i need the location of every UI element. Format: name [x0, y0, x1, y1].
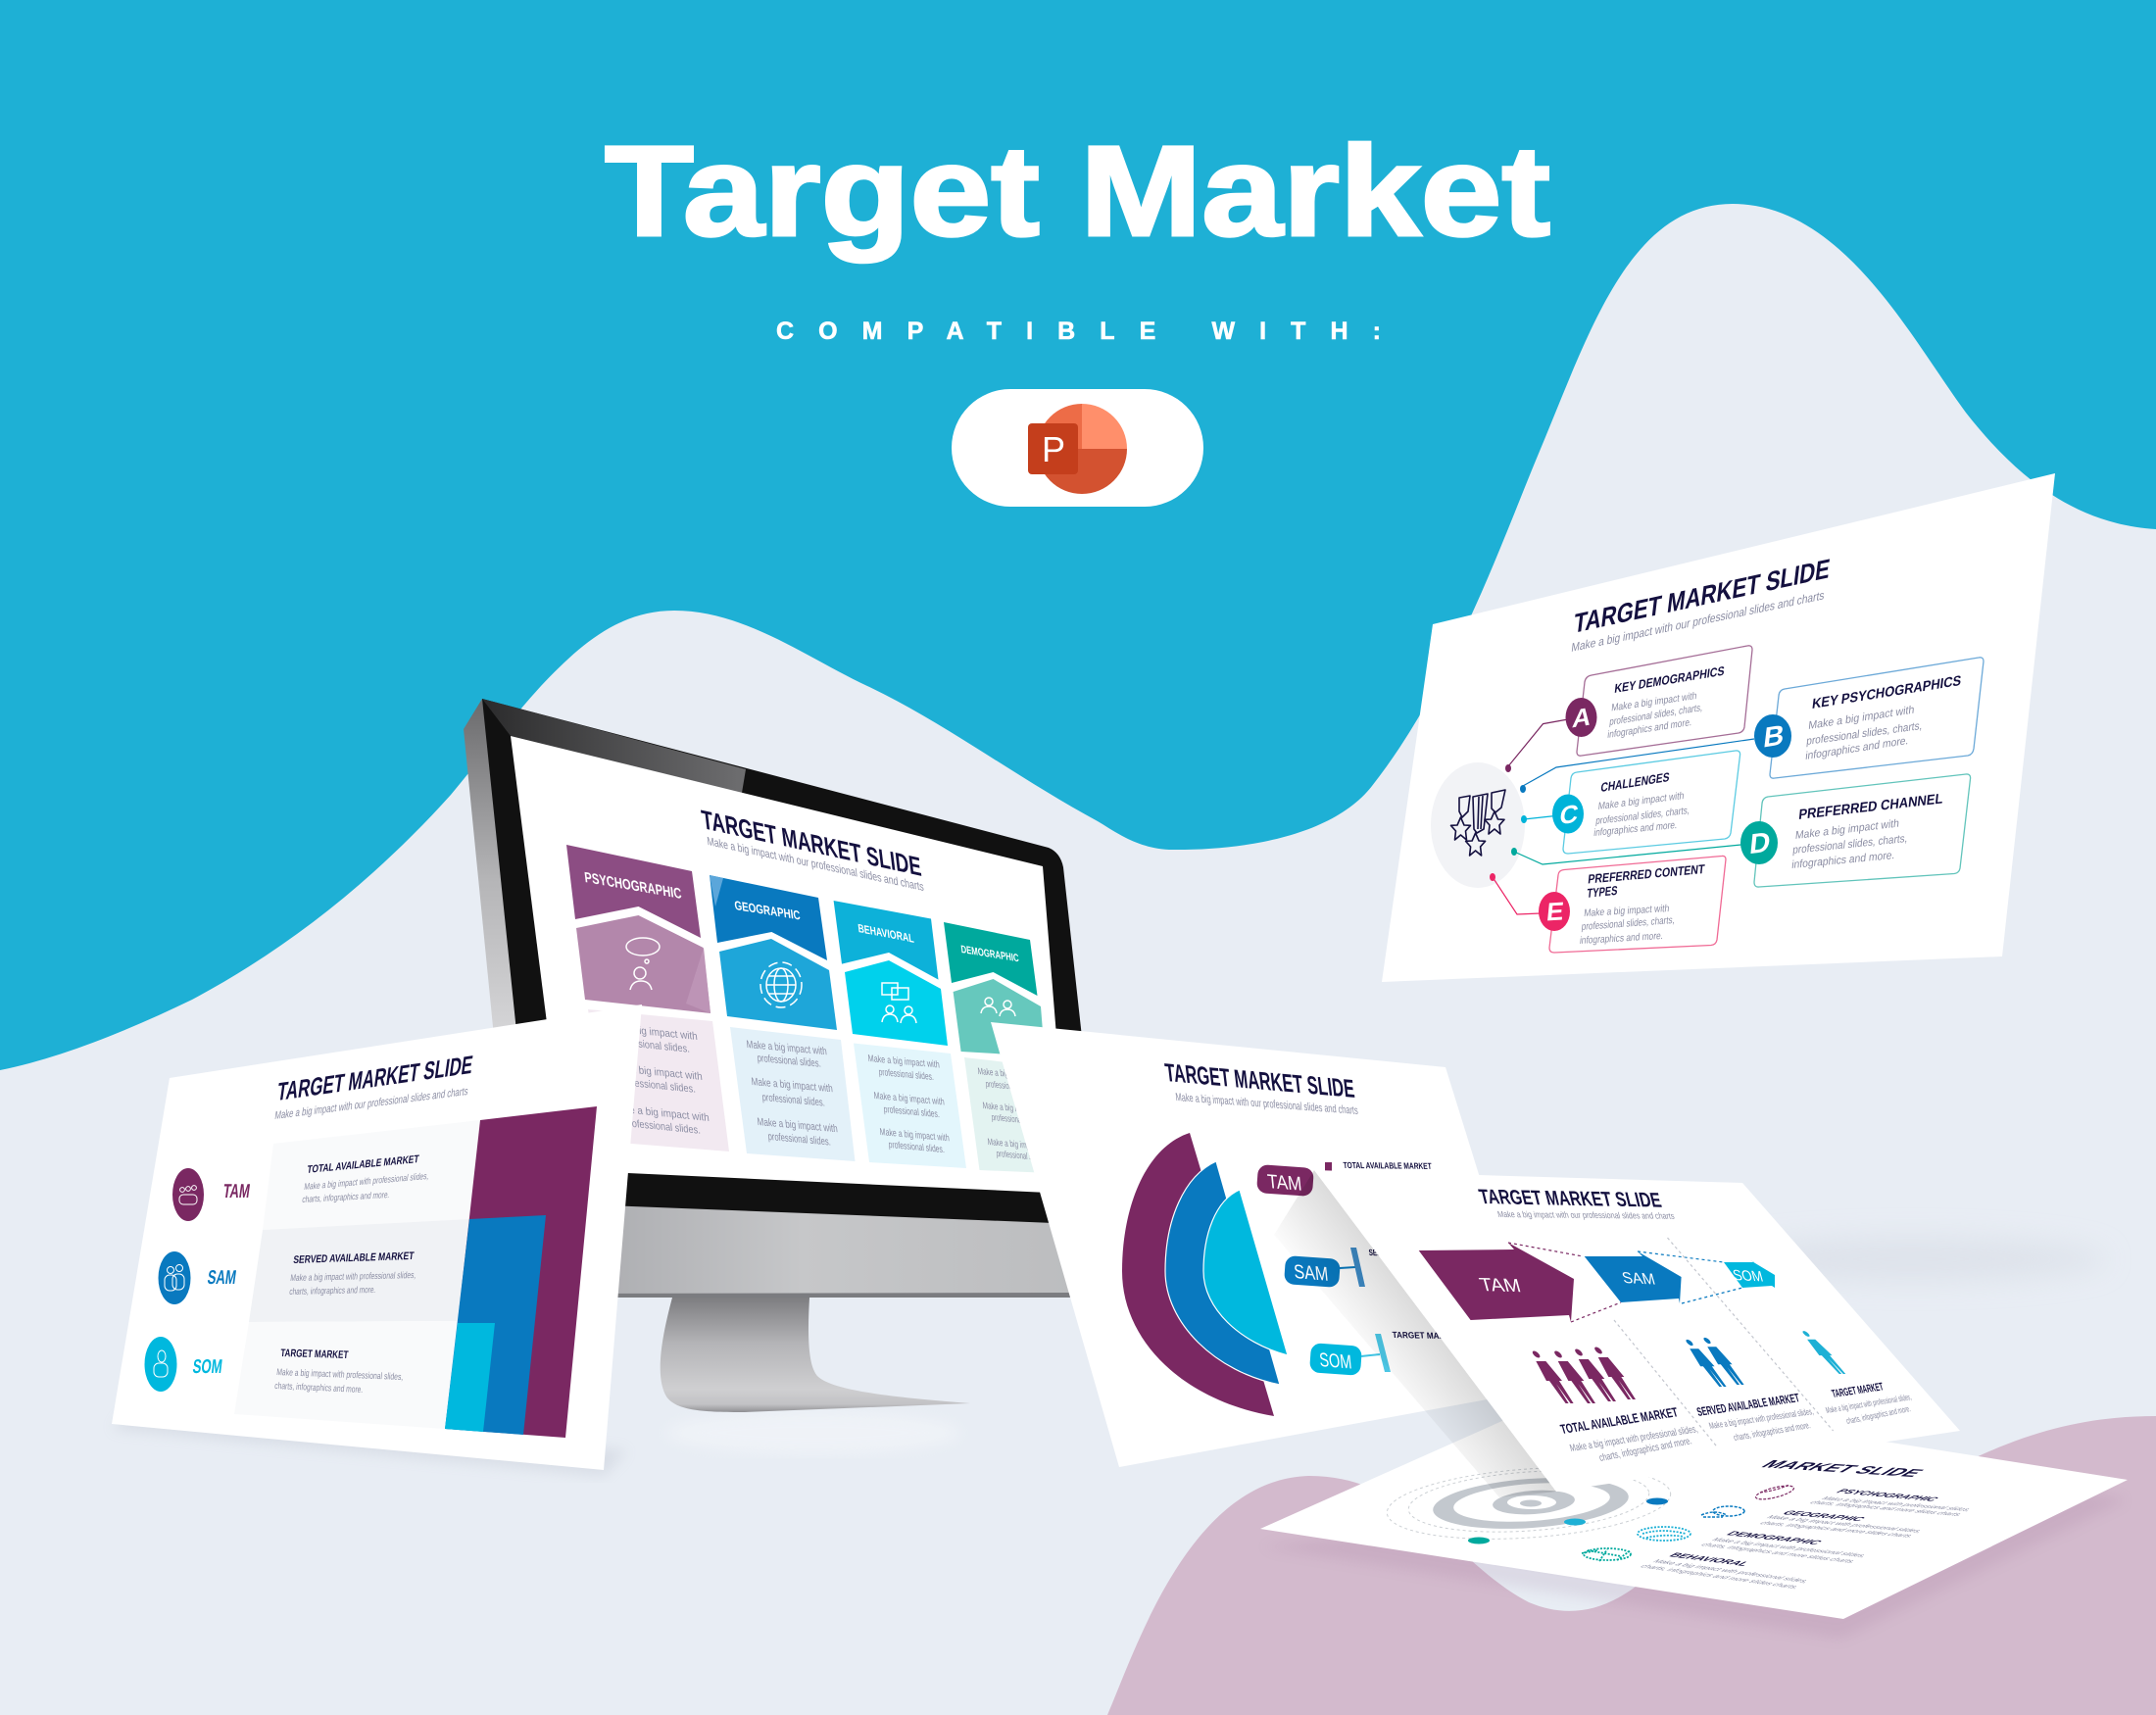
column: geographic: professional slides. — [757, 1053, 821, 1070]
row: TAM: TAM — [221, 1181, 251, 1202]
column: psychographic: Make a big impact with — [611, 1102, 710, 1124]
column: psychographic: professional slides. — [612, 1036, 690, 1055]
slide subtitle: Make a big impact with our professional slides and charts — [707, 834, 924, 894]
card A: key demographics — [1566, 646, 1752, 756]
card E: preferred content types — [1539, 856, 1726, 953]
column: psychographic — [566, 845, 729, 1152]
subtitle: compatible with: COMPATIBLE WITH: — [776, 318, 1381, 345]
label: SAM — [1284, 1248, 1458, 1288]
row: behavioral: charts, infographics and more slides charts. — [1638, 1563, 1803, 1590]
row: demographic — [1638, 1527, 1871, 1564]
caption: target market — [1825, 1381, 1913, 1426]
column: behavioral: Make a big impact with — [867, 1054, 940, 1071]
card A: key demographics: professional slides, charts, — [1609, 702, 1703, 728]
arrow: SOM: SOM — [1731, 1267, 1765, 1285]
row: geographic: GEOGRAPHIC — [1779, 1509, 1868, 1523]
people: served available market — [1680, 1338, 1747, 1387]
card A: key demographics: KEY DEMOGRAPHICS — [1614, 663, 1726, 696]
row: psychographic: PSYCHOGRAPHIC — [1833, 1488, 1941, 1502]
column: psychographic: Make a big impact with — [599, 1021, 698, 1043]
card D: preferred channel: D — [1748, 827, 1772, 860]
card C: challenges: C — [1558, 799, 1580, 830]
row: geographic: charts, infographics and more slides charts. — [1757, 1520, 1918, 1539]
row: SAM: Make a big impact with professional slides, — [290, 1270, 416, 1284]
panel: front slide TAM SAM SOM arrows — [1314, 1170, 1960, 1492]
column: demographic: professional slides. — [996, 1149, 1046, 1163]
card D: preferred channel — [1740, 774, 1971, 887]
caption: target market: charts, infographics and more. — [1845, 1403, 1912, 1426]
row: TAM — [172, 1153, 429, 1221]
slide subtitle: Make a big impact with our professional slides and charts — [274, 1085, 469, 1122]
row: psychographic: Make a big impact with professional slides, — [1819, 1495, 1976, 1512]
slide subtitle: Make a big impact with our professional slides and charts — [1175, 1092, 1358, 1117]
column: behavioral: BEHAVIORAL — [858, 921, 915, 946]
card C: challenges: professional slides, charts, — [1595, 805, 1690, 827]
column: behavioral: professional slides. — [888, 1140, 945, 1155]
slide title: MARKET SLIDE — [1756, 1458, 1929, 1479]
panel: left slide TAM SAM SOM — [112, 1004, 642, 1476]
card C: challenges: infographics and more. — [1593, 819, 1678, 839]
column: psychographic: Make a big impact with — [604, 1061, 703, 1083]
card E: preferred content types: professional slides, charts, — [1581, 914, 1675, 933]
column: behavioral: professional slides. — [883, 1104, 940, 1120]
dashed guides — [1508, 1238, 1834, 1447]
monitor — [464, 699, 1102, 1454]
card B: key psychographics: professional slides, charts, — [1806, 720, 1923, 748]
monitor reflection — [666, 1411, 960, 1454]
row: SOM: TARGET MARKET — [280, 1348, 349, 1361]
label: TAM — [1256, 1160, 1433, 1197]
row: SAM: charts, infographics and more. — [289, 1285, 376, 1298]
label: SAM: SERVED AVAILABLE MARKET — [1368, 1248, 1458, 1259]
caption: served available market: SERVED AVAILABLE MARKET — [1695, 1391, 1801, 1419]
row: behavioral — [1582, 1548, 1813, 1590]
blue wave background — [0, 0, 2156, 1070]
PowerPoint badge — [952, 389, 1203, 507]
row: SOM: charts, infographics and more. — [274, 1381, 364, 1396]
row: SAM: SAM — [206, 1267, 237, 1289]
faint floor shadow — [1715, 1238, 2107, 1281]
column: demographic: professional slides. — [985, 1079, 1035, 1094]
row: demographic: Make a big impact with professional slides, — [1709, 1537, 1871, 1558]
panel: bottom flat slide — [1260, 1392, 2128, 1639]
icon: PowerPoint logo — [1028, 404, 1127, 494]
icon: group — [165, 1264, 184, 1291]
panel: center slide semicircle — [991, 1022, 1545, 1467]
label: SOM: SOM — [1318, 1349, 1352, 1374]
caption: target market: Make a big impact with professional slides, — [1825, 1392, 1913, 1415]
column: behavioral: Make a big impact with — [879, 1127, 950, 1144]
monitor chin — [529, 1199, 1075, 1298]
icon: thought bubble — [626, 938, 660, 990]
caption: served available market — [1695, 1391, 1815, 1443]
label: TAM: TOTAL AVAILABLE MARKET — [1343, 1160, 1433, 1171]
card B: key psychographics — [1754, 658, 1984, 778]
caption: served available market: Make a big impact with professional slides, — [1708, 1406, 1815, 1431]
card D: preferred channel: PREFERRED CHANNEL — [1798, 792, 1943, 823]
icon: person — [154, 1350, 168, 1377]
column: demographic: Make a big impact with — [977, 1066, 1042, 1083]
slide title: TARGET MARKET SLIDE — [1477, 1185, 1664, 1212]
row: behavioral: BEHAVIORAL — [1665, 1551, 1753, 1568]
monitor side edge — [464, 699, 549, 1215]
card A: key demographics: infographics and more. — [1607, 716, 1692, 741]
caption: served available market: charts, infographics and more. — [1733, 1420, 1812, 1443]
column: psychographic: professional slides. — [623, 1117, 701, 1137]
card A: key demographics: A — [1571, 702, 1592, 733]
row: geographic: Make a big impact with professional slides, — [1764, 1514, 1927, 1534]
people: total available market — [1526, 1347, 1640, 1403]
row: TAM: TOTAL AVAILABLE MARKET — [307, 1153, 419, 1176]
column: psychographic: professional slides. — [618, 1076, 696, 1096]
column: geographic — [710, 875, 855, 1161]
card B: key psychographics: KEY PSYCHOGRAPHICS — [1811, 673, 1962, 712]
icon: PowerPoint logo: P — [1042, 429, 1065, 469]
slide title: TARGET MARKET SLIDE — [1163, 1057, 1356, 1103]
panel: right slide A to E — [1382, 473, 2055, 982]
row: SAM: SERVED AVAILABLE MARKET — [293, 1250, 415, 1266]
slide title: TARGET MARKET SLIDE — [1572, 554, 1832, 640]
column: geographic: professional slides. — [761, 1092, 825, 1109]
column: demographic — [944, 922, 1052, 1173]
row: behavioral: Make a big impact with professional slides, — [1650, 1558, 1813, 1584]
row: psychographic: charts, infographics and more slides charts. — [1807, 1499, 1967, 1517]
column: behavioral: Make a big impact with — [873, 1091, 945, 1107]
column: geographic: Make a big impact with — [746, 1039, 827, 1057]
row: geographic — [1701, 1506, 1927, 1539]
card B: key psychographics: infographics and more. — [1805, 735, 1909, 762]
people: target market — [1797, 1331, 1849, 1374]
row: TAM: Make a big impact with professional slides, — [304, 1171, 429, 1193]
monitor screen slide — [511, 736, 1069, 1194]
monitor stand — [661, 1298, 970, 1412]
row: demographic: DEMOGRAPHIC — [1723, 1530, 1825, 1546]
column: geographic: GEOGRAPHIC — [734, 898, 802, 923]
icon: group — [179, 1186, 197, 1204]
shadow of front slide — [1274, 1170, 1556, 1497]
column: demographic: Make a big impact with — [987, 1137, 1052, 1153]
card E: preferred content types: infographics and more. — [1579, 930, 1664, 947]
icon: medals — [1431, 762, 1525, 888]
card D: preferred channel: Make a big impact with — [1794, 818, 1899, 842]
card D: preferred channel: infographics and more. — [1791, 850, 1895, 871]
caption: total available market: Make a big impact with professional slides, — [1569, 1424, 1699, 1454]
row: SOM — [145, 1337, 404, 1396]
nested bar chart — [445, 1106, 597, 1438]
column: geographic: Make a big impact with — [757, 1116, 838, 1135]
card C: challenges: CHALLENGES — [1600, 769, 1671, 795]
column: demographic: DEMOGRAPHIC — [960, 944, 1019, 964]
card E: preferred content types: E — [1545, 897, 1565, 927]
arrow: SAM — [1585, 1251, 1682, 1303]
target chart — [1385, 1459, 1673, 1547]
card E: preferred content types: Make a big impact with — [1584, 903, 1670, 919]
semicircle chart — [1122, 1133, 1288, 1416]
label: SAM: SAM — [1293, 1261, 1329, 1286]
column: demographic: professional slides. — [991, 1112, 1041, 1127]
row: SOM: Make a big impact with professional slides, — [276, 1367, 404, 1383]
column: geographic: professional slides. — [767, 1131, 831, 1149]
card B: key psychographics: Make a big impact with — [1808, 705, 1915, 732]
card E: preferred content types: TYPES — [1587, 883, 1618, 901]
icon: globe — [760, 962, 802, 1007]
column: geographic: Make a big impact with — [751, 1076, 833, 1095]
card C: challenges: Make a big impact with — [1597, 790, 1685, 812]
row: TAM: charts, infographics and more. — [302, 1190, 390, 1205]
arrow: SOM — [1724, 1260, 1775, 1288]
label: SOM: TARGET MARKET — [1392, 1330, 1462, 1341]
card B: key psychographics: B — [1762, 719, 1787, 755]
arrow: SAM: SAM — [1620, 1269, 1657, 1289]
row: SOM: SOM — [191, 1356, 223, 1378]
row: SAM — [159, 1250, 416, 1304]
arrow: TAM: TAM — [1477, 1274, 1523, 1297]
label: TAM: TAM — [1266, 1171, 1302, 1196]
caption: total available market: charts, infographics and more. — [1598, 1436, 1693, 1464]
row backgrounds — [234, 1120, 480, 1429]
caption: target market: TARGET MARKET — [1831, 1381, 1885, 1400]
card D: preferred channel: professional slides, charts, — [1792, 833, 1908, 857]
label: SOM — [1309, 1330, 1462, 1376]
row: demographic: charts, infographics and more slides charts. — [1698, 1542, 1860, 1564]
monitor bezel — [482, 699, 1102, 1225]
slide title: TARGET MARKET SLIDE — [275, 1050, 474, 1106]
icon: speech bubbles and people — [882, 983, 916, 1023]
connector lines — [1490, 719, 1754, 914]
caption: total available market — [1558, 1404, 1699, 1464]
mauve blob background — [1107, 1416, 2156, 1715]
slide subtitle: Make a big impact with our professional slides and charts — [1496, 1209, 1676, 1221]
title: Target Market — [605, 119, 1550, 263]
column: demographic: Make a big impact with — [982, 1101, 1047, 1117]
slide title: TARGET MARKET SLIDE — [700, 804, 923, 882]
column: psychographic: PSYCHOGRAPHIC — [583, 869, 683, 903]
card C: challenges — [1552, 751, 1740, 854]
column: behavioral: professional slides. — [878, 1067, 934, 1083]
icon: people exchange — [981, 998, 1015, 1016]
card A: key demographics: Make a big impact with — [1611, 690, 1697, 713]
row: psychographic — [1754, 1483, 1976, 1517]
arrow: TAM — [1419, 1243, 1574, 1322]
column: behavioral — [834, 901, 966, 1168]
card E: preferred content types: PREFERRED CONTENT — [1588, 861, 1705, 886]
caption: total available market: TOTAL AVAILABLE MARKET — [1558, 1404, 1680, 1437]
slide subtitle: Make a big impact with our professional slides and charts — [1571, 588, 1825, 655]
